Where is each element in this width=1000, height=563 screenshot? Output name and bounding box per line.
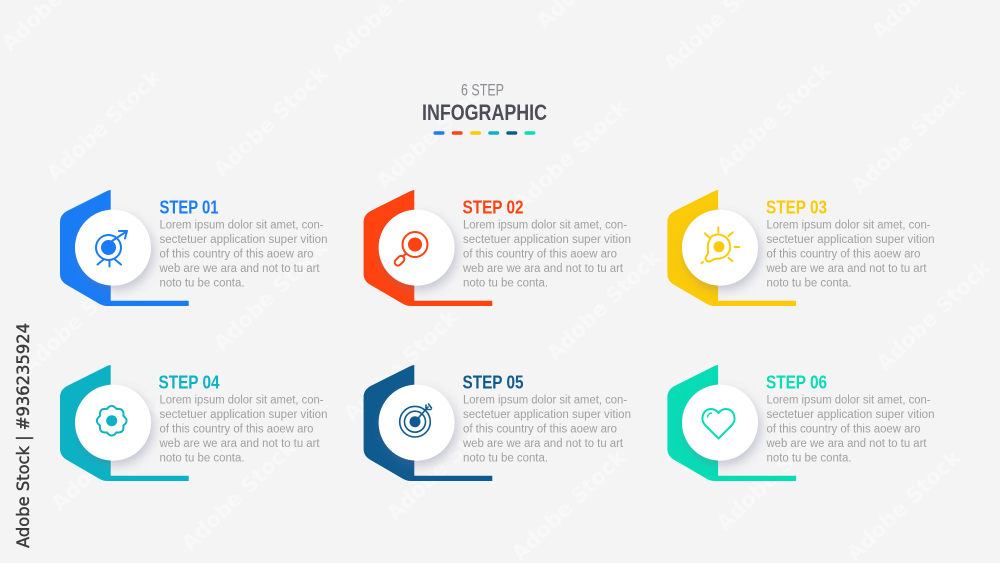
watermark pattern: Adobe Stock [177, 435, 301, 556]
heading: STEP 01 [160, 196, 218, 218]
icon: heart [702, 409, 735, 438]
hexagon bracket [364, 365, 492, 481]
body text: web are we ara and not to tu art [159, 438, 320, 450]
watermark pattern: Adobe Stock [47, 395, 171, 516]
panel: step 06 [667, 365, 934, 481]
white circle [682, 210, 758, 286]
body text [159, 220, 328, 290]
watermark pattern: Adobe Stock [209, 61, 333, 182]
hexagon bracket [60, 365, 189, 481]
body text: sectetuer application super vition [463, 409, 631, 421]
watermark pattern: Adobe Stock [42, 65, 166, 186]
hexagon bracket [60, 190, 189, 306]
white circle [379, 210, 455, 286]
body text: of this country of this aoew aro [766, 248, 920, 260]
panel: step 03 [667, 190, 934, 306]
body text: Lorem ipsum dolor sit amet, con- [463, 394, 627, 406]
body text [462, 220, 631, 290]
watermark pattern: Adobe Stock [712, 415, 836, 536]
watermark pattern: Adobe Stock [382, 405, 506, 526]
body text: sectetuer application super vition [766, 234, 934, 246]
body text: noto tu be conta. [463, 278, 548, 290]
body text: of this country of this aoew aro [463, 248, 617, 260]
body text: Lorem ipsum dolor sit amet, con- [160, 394, 324, 406]
icon: light bulb [702, 228, 739, 263]
body text: Lorem ipsum dolor sit amet, con- [766, 220, 931, 232]
colour dashes [434, 131, 535, 135]
body text: web are we ara and not to tu art [766, 438, 927, 450]
heading: STEP 06 [766, 372, 827, 392]
subtitle: 6 STEP: 6 STEP [461, 80, 504, 100]
title block [422, 80, 547, 135]
body text: noto tu be conta. [160, 452, 244, 464]
watermark pattern: Adobe Stock [847, 78, 971, 199]
body text: noto tu be conta. [766, 278, 852, 290]
white circle [379, 385, 455, 461]
watermark pattern: Adobe Stock [209, 235, 333, 356]
watermark pattern: Adobe Stock [842, 445, 966, 563]
white circle [75, 385, 151, 461]
panel: step 02 [364, 190, 631, 306]
panel: step 01 [60, 190, 328, 306]
body text: noto tu be conta. [160, 278, 244, 290]
panel: step 04 [60, 365, 328, 481]
watermark pattern: Adobe Stock [339, 305, 463, 426]
body text: noto tu be conta. [766, 452, 852, 464]
body text: sectetuer application super vition [160, 409, 328, 421]
body text [159, 394, 328, 464]
body text: web are we ara and not to tu art [159, 263, 320, 275]
heading: STEP 05 [462, 372, 524, 392]
watermark pattern: Adobe Stock [712, 58, 836, 179]
body text [462, 394, 631, 464]
body text: of this country of this aoew aro [160, 248, 314, 260]
heading: INFOGRAPHIC: INFOGRAPHIC [422, 100, 547, 125]
icon: flower gear [97, 406, 127, 436]
watermark pattern: Adobe Stock [509, 95, 633, 216]
icon: magnifier [393, 232, 428, 267]
body text: of this country of this aoew aro [766, 424, 920, 436]
watermark pattern: Adobe Stock [542, 245, 666, 366]
watermark pattern: Adobe Stock [372, 73, 496, 194]
heading: STEP 02 [462, 196, 524, 218]
stock id side label: Adobe Stock | #936235924 [14, 323, 34, 548]
white circle [682, 385, 758, 461]
icon: bullseye with dart [400, 404, 432, 437]
body text: web are we ara and not to tu art [462, 263, 624, 275]
panel: step 05 [364, 365, 631, 481]
body text [766, 220, 934, 290]
heading: STEP 03 [766, 196, 827, 218]
icon: target with arrow [96, 231, 127, 266]
hexagon bracket [667, 190, 796, 306]
body text: Lorem ipsum dolor sit amet, con- [463, 220, 627, 232]
body text: web are we ara and not to tu art [766, 263, 927, 275]
watermark pattern: Adobe Stock [17, 258, 141, 379]
white circle [75, 210, 151, 286]
hexagon bracket [364, 190, 492, 306]
hexagon bracket [667, 365, 796, 481]
body text: sectetuer application super vition [766, 409, 934, 421]
body text: of this country of this aoew aro [160, 424, 314, 436]
watermark pattern: Adobe Stock [507, 445, 631, 563]
body text: web are we ara and not to tu art [462, 438, 624, 450]
watermark pattern: Adobe Stock [872, 255, 996, 376]
body text [766, 394, 934, 464]
body text: of this country of this aoew aro [463, 424, 617, 436]
heading: STEP 04 [158, 372, 220, 392]
body text: noto tu be conta. [463, 452, 548, 464]
body text: sectetuer application super vition [160, 234, 328, 246]
body text: sectetuer application super vition [463, 234, 631, 246]
body text: Lorem ipsum dolor sit amet, con- [766, 394, 931, 406]
body text: Lorem ipsum dolor sit amet, con- [160, 220, 324, 232]
